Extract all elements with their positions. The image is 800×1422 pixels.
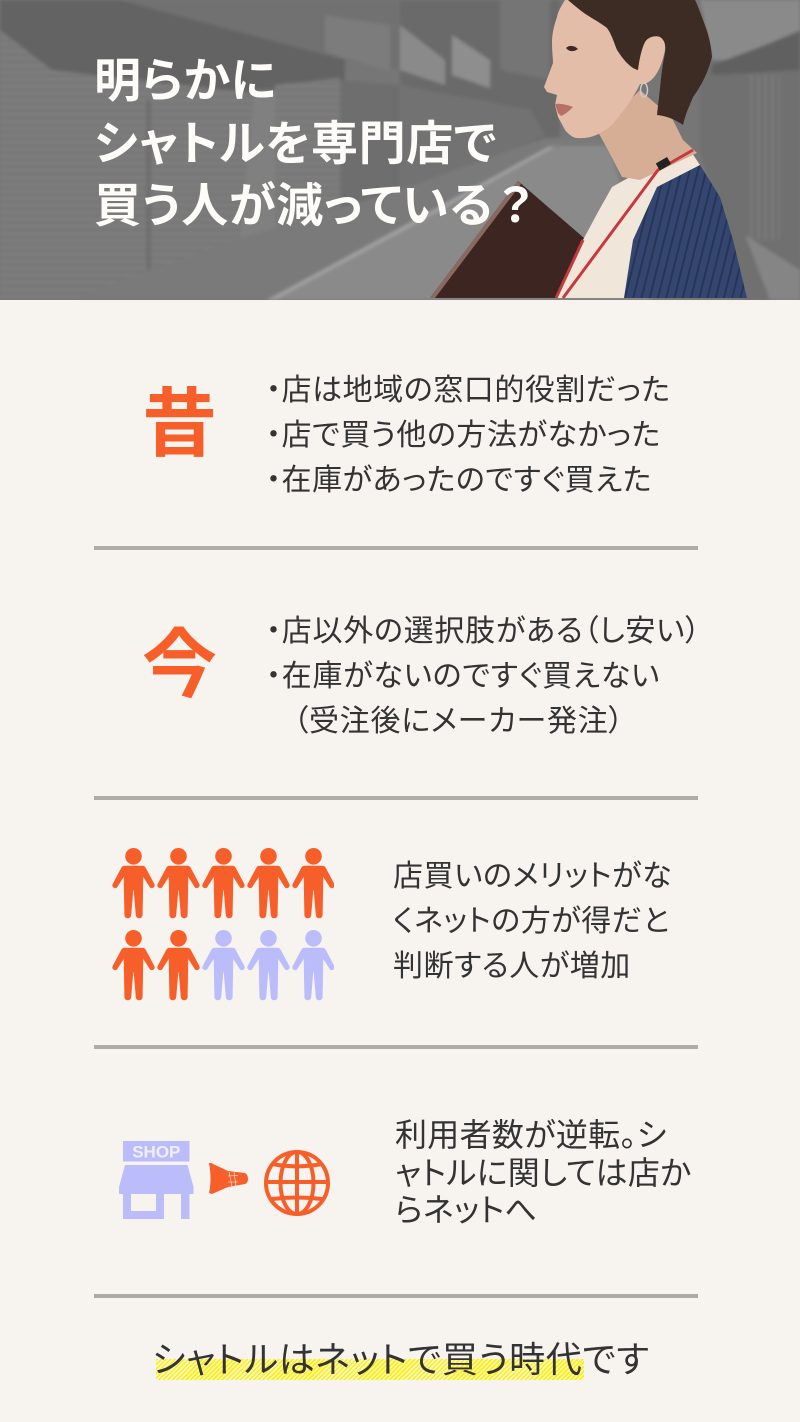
title: シャトルを専門店で: [94, 116, 497, 170]
list: present: [266, 615, 701, 738]
road: [67, 138, 655, 300]
list: past: [266, 374, 671, 497]
kanji: present: 今: [142, 623, 217, 707]
eye and lips: [566, 46, 578, 51]
title: [94, 54, 540, 232]
title: 明らかに: [94, 54, 277, 107]
list: present: ・店以外の選択肢がある（し安い）: [266, 615, 701, 648]
woman: [430, 0, 747, 298]
right side buildings: [700, 0, 800, 300]
text: shop to net: ャトルに関しては店か: [395, 1154, 691, 1190]
hair: [568, 0, 712, 125]
folder: [430, 181, 584, 298]
list: present: （受注後にメーカー発注）: [293, 705, 624, 738]
text: shop to net: [395, 1117, 691, 1228]
title: 買う人が減っている？: [94, 179, 540, 232]
icon: shop: SHOP: [132, 1142, 180, 1162]
text: people: くネットの方が得だと: [393, 905, 670, 938]
icon: shop: [119, 1141, 194, 1219]
header banner: [0, 0, 800, 300]
blouse: [556, 150, 700, 298]
icon: shuttlecock: [209, 1163, 248, 1194]
panel: people: [112, 848, 672, 1000]
icon: globe: [264, 1150, 330, 1216]
text: people: 判断する人が増加: [393, 950, 631, 983]
neck: [598, 90, 697, 180]
text: shop to net: 利用者数が逆転。シ: [395, 1117, 667, 1153]
highlight underline: [156, 1359, 584, 1380]
panel: shop to net: [119, 1117, 691, 1228]
list: past: ・在庫があったのですぐ買えた: [266, 464, 652, 497]
upper buildings: [120, 0, 400, 70]
kanji: past: 昔: [142, 382, 217, 466]
earring: [640, 83, 648, 97]
text: people: [393, 860, 672, 983]
text: people: 店買いのメリットがな: [393, 860, 672, 893]
list: present: ・在庫がないのですぐ買えない: [266, 660, 660, 693]
panel: present: [142, 615, 701, 738]
text: shop to net: らネットへ: [395, 1192, 537, 1228]
cardigan: [624, 165, 747, 298]
conclusion: シャトルはネットで買う時代です: [152, 1339, 650, 1380]
list: past: ・店で買う他の方法がなかった: [266, 419, 661, 452]
list: past: ・店は地域の窓口的役割だった: [266, 374, 671, 407]
panel: past: [142, 374, 671, 497]
icon: ten people: [112, 848, 334, 1000]
street photo background and woman: [0, 0, 800, 300]
left shutters: [0, 30, 270, 300]
lanyard: [563, 150, 693, 298]
face: [544, 0, 668, 138]
